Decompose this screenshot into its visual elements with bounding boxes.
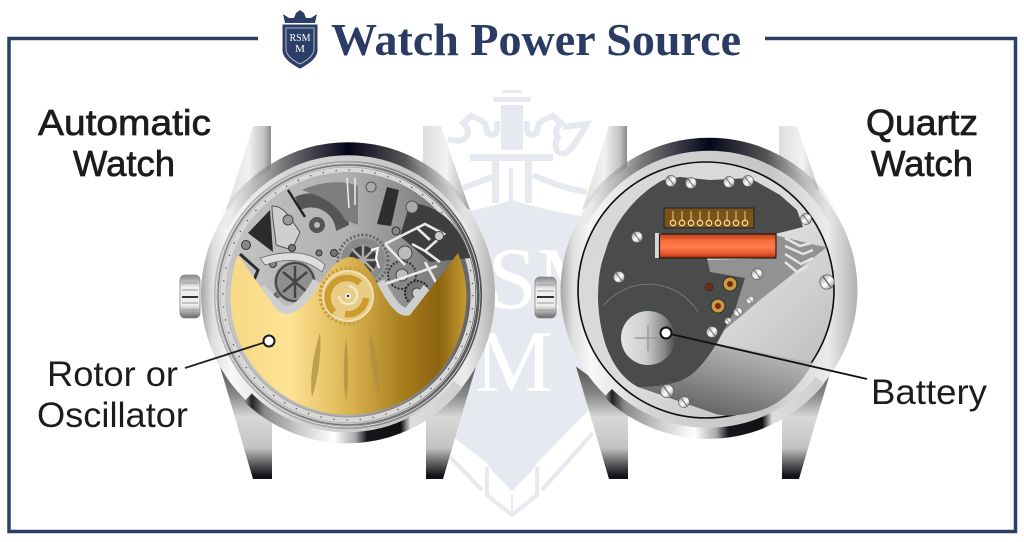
case right <box>561 126 857 479</box>
header logo <box>283 10 317 68</box>
label: rotor or oscillator <box>37 355 188 435</box>
orange bar <box>655 233 776 258</box>
zigzag contacts <box>785 238 813 272</box>
battery seat arc <box>604 284 698 312</box>
crown right <box>535 277 556 318</box>
heading: automatic watch <box>38 102 211 184</box>
screws <box>614 176 834 408</box>
rotor grooves <box>311 333 380 402</box>
heading: quartz watch: Watch <box>871 143 973 184</box>
movement left <box>226 172 470 416</box>
label: rotor or oscillator: Rotor or <box>47 355 178 394</box>
heading: quartz watch: Quartz <box>866 102 978 143</box>
heading: quartz watch <box>866 102 978 184</box>
automatic watch <box>180 126 495 479</box>
contacts <box>705 277 737 313</box>
heading: automatic watch: Watch <box>73 143 175 184</box>
gears right <box>388 246 429 305</box>
battery <box>621 311 675 365</box>
label: battery: Battery <box>871 373 988 412</box>
heading: automatic watch: Automatic <box>38 102 211 143</box>
balance left <box>240 253 325 303</box>
gear centre <box>338 235 388 285</box>
back plate <box>578 162 834 418</box>
watermark: brand crest: RSM <box>429 231 615 328</box>
quartz watch <box>535 126 857 479</box>
label: rotor or oscillator: Oscillator <box>37 396 188 435</box>
rotor <box>230 253 466 415</box>
title: Watch Power Source <box>331 14 741 65</box>
watermark: brand crest <box>420 90 615 515</box>
crown left <box>180 275 200 318</box>
rotor gear <box>320 268 376 324</box>
white bridge <box>385 224 444 290</box>
pointer: battery <box>660 328 867 379</box>
pointer: rotor <box>185 336 274 368</box>
case left <box>201 126 495 479</box>
header logo: M <box>295 43 305 55</box>
watermark: brand crest: M <box>475 314 553 411</box>
outer ring left <box>214 161 482 429</box>
header logo: RSM <box>289 33 311 44</box>
circuit dark area <box>598 177 803 387</box>
connector strip <box>664 208 754 228</box>
